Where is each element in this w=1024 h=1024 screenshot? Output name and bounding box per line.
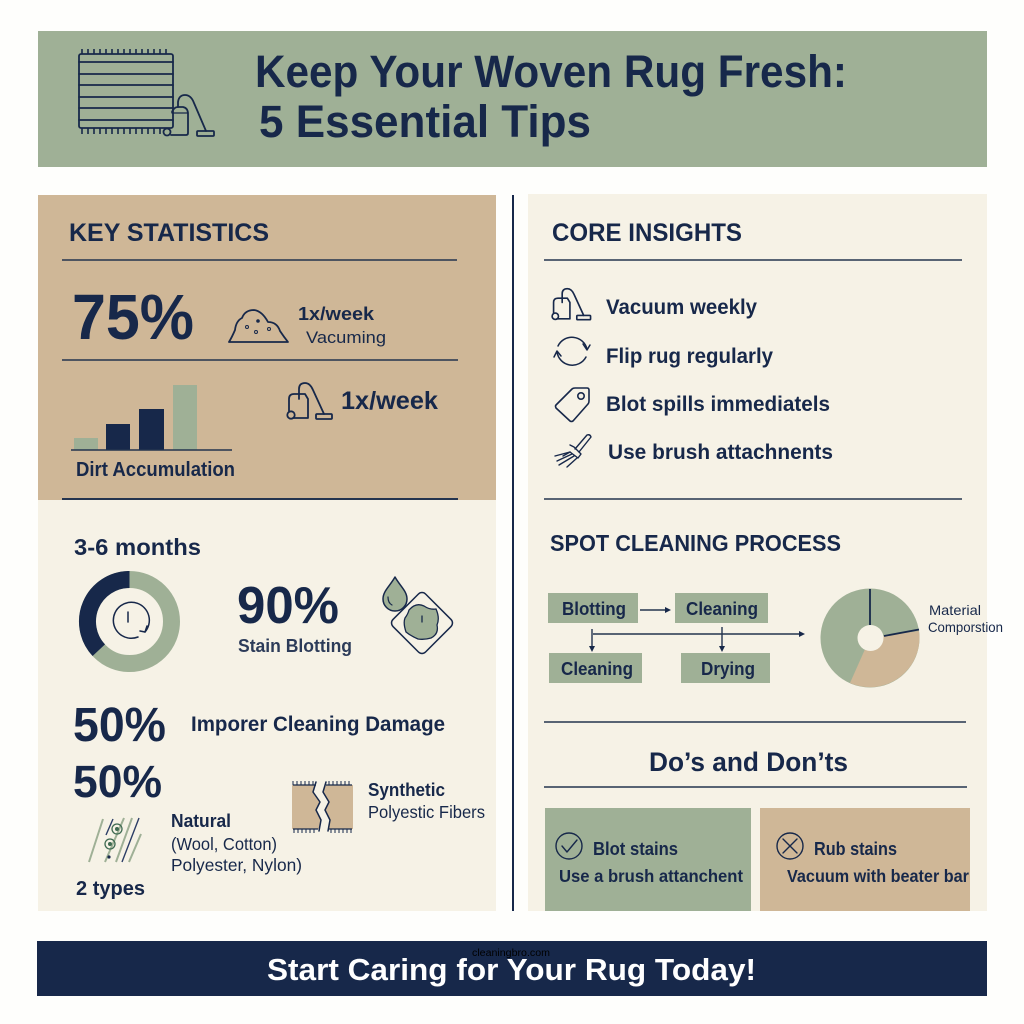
watermark: cleaningbro.com <box>472 948 550 959</box>
label: material composition: Comporstion <box>928 619 1003 635</box>
synthetic fibers text: Synthetic <box>368 780 445 800</box>
stat: 90% stain blotting: Stain Blotting <box>238 636 352 656</box>
step: drying <box>681 653 770 683</box>
insight: blot spills: Blot spills immediatels <box>606 393 830 416</box>
card: don'ts: Vacuum with beater bar <box>787 866 969 886</box>
stat: 50% improper cleaning damage: Imporer Cleaning Damage <box>191 713 445 736</box>
title: Keep Your Woven Rug Fresh: <box>255 46 847 97</box>
pie chart: material composition <box>820 588 920 688</box>
vacuuming frequency text: Vacuming <box>306 328 386 347</box>
panel: right column <box>528 194 1003 911</box>
natural fibers text: Natural <box>171 811 231 831</box>
label: material composition: Material <box>929 602 981 618</box>
bar chart: dirt accumulation <box>71 385 235 481</box>
insight: vacuum weekly: Vacuum weekly <box>606 296 757 319</box>
label: 3-6 months: 3-6 months <box>74 534 201 560</box>
insight: flip rug: Flip rug regularly <box>606 345 773 368</box>
icon: fibers <box>89 818 141 862</box>
stat: 1x/week: 1x/week <box>341 387 438 415</box>
bar chart: dirt accumulation: Dirt Accumulation <box>76 459 235 481</box>
stat: 50% improper cleaning damage: 50% <box>73 699 166 752</box>
title: 5 Essential Tips <box>259 96 591 147</box>
label: 2 types: 2 types <box>76 878 145 900</box>
icon: vacuum <box>287 383 332 419</box>
icon: check circle <box>556 833 582 859</box>
icon: stain and drop <box>383 577 455 656</box>
stat: 75%: 75% <box>72 281 194 353</box>
step: cleaning <box>675 593 768 623</box>
label: material composition <box>928 602 1003 635</box>
footer banner: Start Caring for Your Rug Today! <box>267 952 756 987</box>
panel: key statistics <box>38 195 496 500</box>
header banner <box>38 31 987 167</box>
card: do's: Blot stains <box>593 839 678 859</box>
natural fibers text: (Wool, Cotton) <box>171 834 277 854</box>
arrows <box>589 607 805 652</box>
natural fibers text: Polyester, Nylon) <box>171 855 302 875</box>
synthetic fibers text: Polyestic Fibers <box>368 802 485 822</box>
stat: 90% stain blotting <box>237 577 352 656</box>
heading: do's and don'ts: Do’s and Don’ts <box>649 747 848 777</box>
icon: tag <box>556 388 589 422</box>
vacuuming frequency text <box>298 304 386 347</box>
card: don'ts <box>760 808 970 911</box>
icon: clock <box>113 602 149 638</box>
icon: torn rug <box>292 781 353 833</box>
step: blotting: Blotting <box>562 598 626 619</box>
stat: 50%: 50% <box>73 756 162 807</box>
icon: dirt pile <box>229 310 288 342</box>
natural fibers text <box>171 811 302 875</box>
icon: vacuum <box>552 289 591 320</box>
card: do's: Use a brush attanchent <box>559 866 743 886</box>
heading: spot cleaning process: SPOT CLEANING PROCESS <box>550 530 841 556</box>
card: do's <box>545 808 751 911</box>
heading: core insights: CORE INSIGHTS <box>552 219 742 247</box>
step: cleaning second: Cleaning <box>561 658 633 679</box>
stat: 90% stain blotting: 90% <box>237 577 339 635</box>
icon: brush <box>555 435 591 467</box>
panel: lower left statistics <box>38 500 496 911</box>
stat: 50% improper cleaning damage <box>73 699 445 752</box>
flowchart <box>548 593 805 683</box>
footer banner <box>37 941 987 996</box>
icon: cross circle <box>777 833 803 859</box>
donut chart <box>87 580 172 664</box>
vacuuming frequency text: 1x/week <box>298 304 375 324</box>
step: cleaning second <box>549 653 642 683</box>
icon: rotate arrows <box>554 337 590 365</box>
step: blotting <box>548 593 638 623</box>
step: cleaning: Cleaning <box>686 598 758 619</box>
synthetic fibers text <box>368 780 485 822</box>
step: drying: Drying <box>701 658 755 679</box>
icon: rug and vacuum <box>79 49 214 136</box>
title <box>255 46 847 147</box>
card: don'ts: Rub stains <box>814 839 897 859</box>
insight: brush attachments: Use brush attachnents <box>608 441 833 464</box>
heading: key statistics: KEY STATISTICS <box>69 219 269 247</box>
